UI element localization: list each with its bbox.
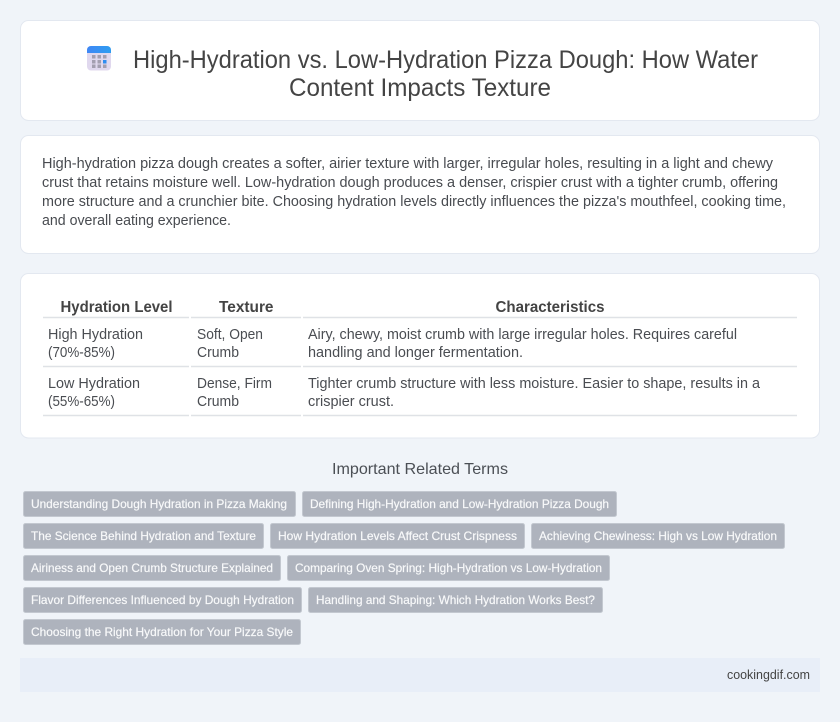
tag	[24, 524, 264, 548]
table row: high hydration: Crumb	[197, 345, 239, 361]
tag list	[24, 492, 784, 644]
tag: Defining High-Hydration and Low-Hydration Pizza Dough	[310, 497, 609, 511]
table row: low hydration: (55%-65%)	[48, 394, 115, 410]
tag	[532, 524, 784, 548]
panel: description	[20, 136, 820, 254]
panel: header	[20, 20, 820, 120]
text block: description: and overall eating experience.	[42, 213, 231, 229]
tag	[308, 588, 602, 612]
tag	[24, 556, 280, 580]
heading: related terms: Important Related Terms	[332, 461, 508, 478]
tag: The Science Behind Hydration and Texture	[31, 529, 256, 543]
footer: cookingdif.com	[727, 667, 810, 682]
tag	[24, 492, 296, 516]
tag: Handling and Shaping: Which Hydration Works Best?	[316, 593, 595, 607]
text block: description: more structure and a crunchier bite. Choosing hydration levels directly influences the pizza's mouthfeel, cooking time,	[42, 194, 786, 210]
title: High-Hydration vs. Low-Hydration Pizza Dough: How Water	[133, 46, 758, 74]
table row: high hydration: Soft, Open	[197, 327, 263, 343]
table row: low hydration: Low Hydration	[48, 376, 140, 392]
tag	[270, 524, 524, 548]
panel: comparison table	[20, 274, 820, 438]
tag: Understanding Dough Hydration in Pizza Making	[31, 497, 287, 511]
icon: calendar	[87, 46, 111, 70]
tag: Choosing the Right Hydration for Your Pizza Style	[31, 625, 293, 639]
title: Content Impacts Texture	[289, 74, 551, 102]
tag: Airiness and Open Crumb Structure Explained	[31, 561, 273, 575]
tag: Comparing Oven Spring: High-Hydration vs Low-Hydration	[295, 561, 602, 575]
footer	[20, 658, 820, 692]
table row: low hydration	[48, 376, 760, 410]
table row: high hydration: handling and longer fermentation.	[308, 345, 523, 361]
text block: description: High-hydration pizza dough creates a softer, airier texture with larger, irregular holes, resulting in a light and chewy	[42, 156, 774, 172]
tag: How Hydration Levels Affect Crust Crispness	[278, 529, 517, 543]
table row: low hydration: crispier crust.	[308, 394, 394, 410]
tag	[24, 620, 300, 644]
table row: low hydration: Dense, Firm	[197, 376, 272, 392]
table row: high hydration: High Hydration	[48, 327, 143, 343]
tag	[288, 556, 610, 580]
table row: high hydration: (70%-85%)	[48, 345, 115, 361]
text block: description	[42, 156, 786, 229]
tag: Achieving Chewiness: High vs Low Hydration	[539, 529, 777, 543]
table header: Characteristics	[496, 299, 605, 316]
table header: Texture	[219, 299, 274, 316]
table header	[60, 299, 605, 316]
text block: description: crust that retains moisture well. Low-hydration dough produces a denser, crispier crust with a tighter crumb, offering	[42, 175, 778, 191]
table row: high hydration: Airy, chewy, moist crumb with large irregular holes. Requires careful	[308, 327, 737, 343]
table row: high hydration	[48, 327, 737, 361]
table header: Hydration Level	[60, 299, 172, 316]
tag: Flavor Differences Influenced by Dough Hydration	[31, 593, 294, 607]
tag	[302, 492, 616, 516]
table row: low hydration: Crumb	[197, 394, 239, 410]
table row: low hydration: Tighter crumb structure with less moisture. Easier to shape, results in a	[308, 376, 760, 392]
tag	[24, 588, 302, 612]
title	[133, 46, 758, 102]
